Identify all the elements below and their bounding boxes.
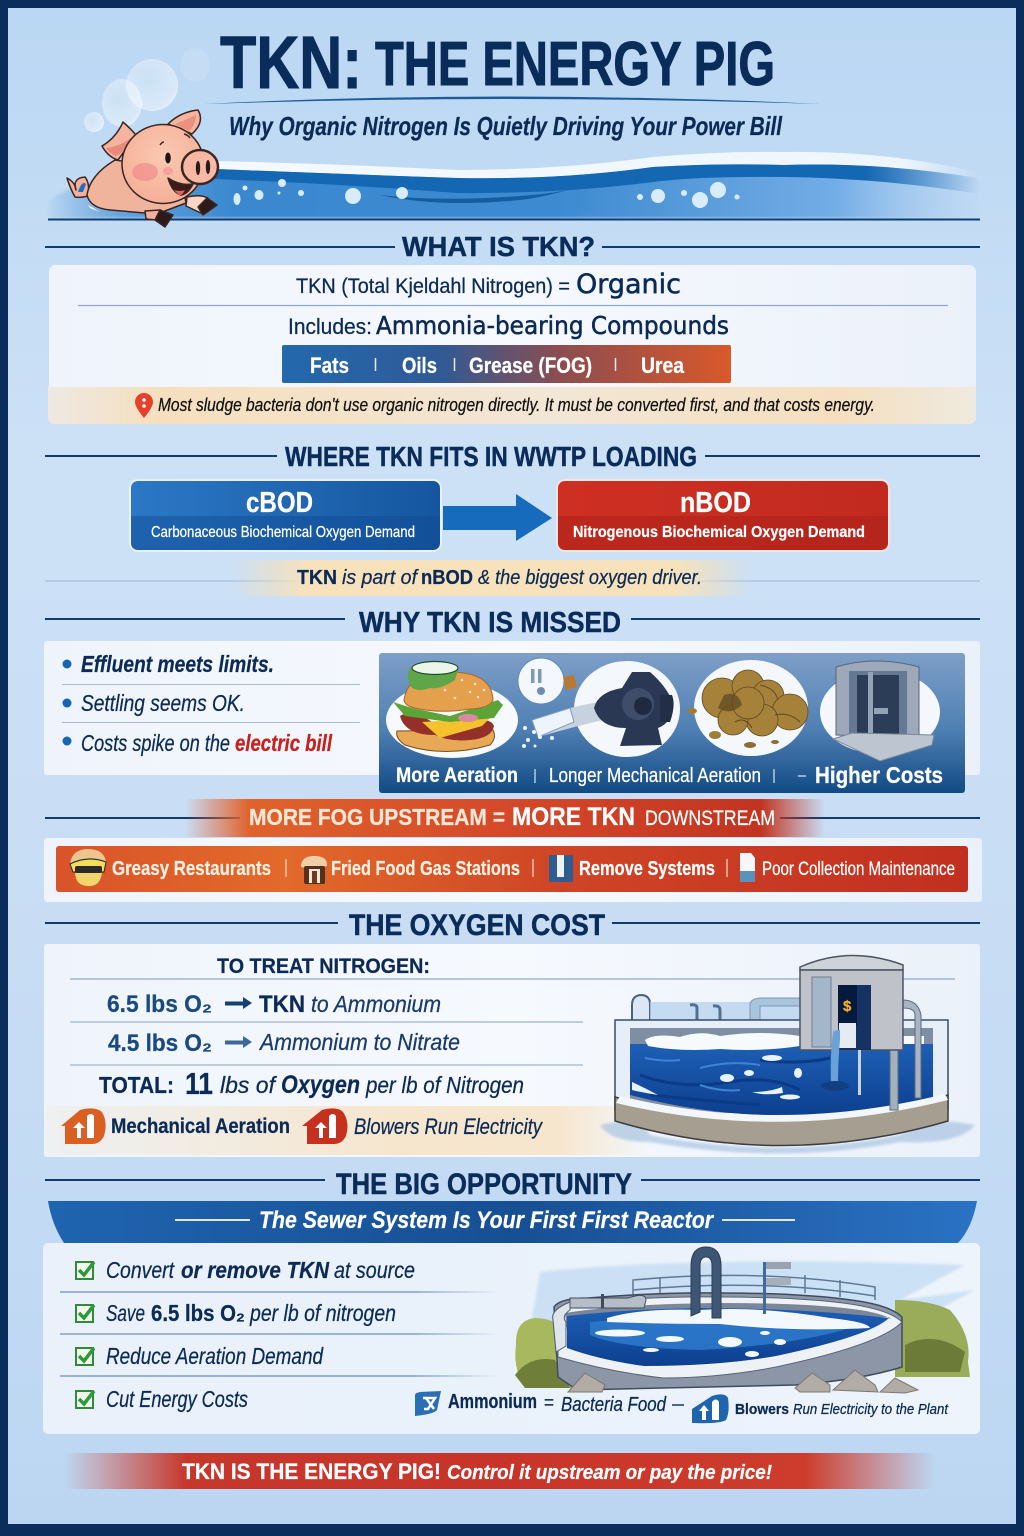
panel: symptoms list: Effluent meets limits. [81,651,274,677]
labels: consequences: Higher Costs [815,762,943,788]
panel: definition [48,265,976,424]
footer banner: TKN IS THE ENERGY PIG! [182,1459,441,1484]
callout: TKN part of nBOD: & the biggest oxygen driver. [478,567,702,589]
note: ammonium bacteria food: = [544,1393,554,1414]
footer banner [65,1453,935,1489]
banner: sewer system reactor [48,1201,977,1243]
checklist: or remove TKN [181,1257,329,1283]
note: blowers electricity [692,1394,949,1423]
section: why TKN is missed [44,607,980,793]
section: the oxygen cost [44,909,980,1157]
illustration: aeration tank with blower housing: $ [843,998,852,1015]
row: TKN to ammonium: to Ammonium [311,991,441,1017]
icon: pig mascot [67,110,218,227]
definition text [296,269,681,300]
row: total oxygen: lbs of [220,1072,278,1098]
box: cBOD: Carbonaceous Biochemical Oxygen Demand [151,524,415,541]
panel: FOG sources: Poor Collection Maintenance [762,859,955,880]
checklist: Cut Energy Costs [106,1386,248,1412]
includes text: Includes: [288,314,372,339]
icon: alert bubble [518,658,577,704]
panel: FOG sources: Fried Food Gas Stations [331,858,520,880]
bar: compounds: Oils [402,353,437,378]
panel: symptoms list: Costs spike on the [81,730,230,756]
bar: compounds: Urea [641,353,685,378]
strip: aeration labels [46,1106,650,1155]
labels: consequences: More Aeration [396,764,518,787]
checklist: at source [334,1257,415,1283]
row: ammonium to nitrate: 4.5 lbs O₂ [108,1030,212,1057]
row: total oxygen: per lb of Nitrogen [365,1072,524,1098]
icon: sludge pile [687,660,808,756]
note: blowers electricity: Blowers [735,1401,789,1418]
row: ammonium to nitrate [108,1029,460,1057]
section: where TKN fits [45,441,980,596]
callout: TKN part of nBOD [45,560,980,596]
panel: oxygen calculation: TO TREAT NITROGEN: [217,955,430,978]
checklist: Reduce Aeration Demand [106,1343,324,1369]
checklist: Save [106,1300,145,1326]
row: TKN to ammonium: 6.5 lbs O₂ [107,991,212,1018]
icon: bubbles [84,48,210,132]
row: total oxygen: TOTAL: [99,1072,174,1098]
title: TKN: [220,21,362,104]
checklist: per lb of nitrogen [249,1300,396,1326]
callout: sludge bacteria note [48,387,976,424]
callout: TKN part of nBOD: TKN [297,567,337,589]
labels: consequences [396,762,943,788]
bar: compounds: Grease (FOG) [469,353,592,378]
icon: fried food store [301,856,327,884]
note: ammonium bacteria food [415,1391,684,1416]
definition text: Organic [576,269,681,300]
title: THE ENERGY PIG [375,30,775,99]
icon: cost cabinet [820,661,940,761]
box: nBOD: nBOD [680,487,751,519]
panel: consequences illustration [379,653,965,793]
heading: where TKN fits: WHERE TKN FITS IN WWTP LOADING [285,441,697,472]
row: TKN to ammonium [107,991,441,1018]
includes text: Ammonia-bearing Compounds [376,311,729,340]
heading: what is TKN: WHAT IS TKN? [402,231,595,262]
box: cBOD [130,480,441,551]
icon: mechanical aerator [522,661,680,757]
callout: sludge bacteria note: Most sludge bacteria don't use organic nitrogen directly. It must be converted first, and that costs energy. [158,395,875,415]
heading: the oxygen cost: THE OXYGEN COST [349,909,605,942]
note: blowers electricity: Run Electricity to the Plant [793,1401,949,1418]
heading: the big opportunity: THE BIG OPPORTUNITY [336,1168,632,1201]
row: total oxygen [99,1066,524,1101]
callout: TKN part of nBOD: is part of [342,567,419,589]
icon: removal system [549,855,573,882]
banner: more FOG upstream: MORE TKN [512,803,635,831]
icon: burger [386,662,518,758]
icon: greasy burger [70,849,106,886]
bar: compounds [282,345,731,383]
banner: more FOG upstream [45,799,980,837]
labels: consequences: Longer Mechanical Aeration [549,765,761,787]
row: total oxygen: Oxygen [281,1071,360,1099]
illustration: aeration tank with blower housing [600,955,975,1154]
row: TKN to ammonium: TKN [259,991,305,1018]
footer banner: Control it upstream or pay the price! [447,1462,772,1484]
illustration: circular aeration basin [515,1247,975,1393]
arrow: cBOD to nBOD [443,494,552,541]
box: nBOD [557,480,889,551]
water wave banner [48,152,980,220]
banner: sewer system reactor: The Sewer System Is Your First First Reactor [259,1207,714,1234]
banner: more FOG upstream: MORE FOG UPSTREAM = [249,804,505,830]
panel: symptoms list [44,641,980,775]
strip: aeration labels: Blowers Run Electricity [354,1114,544,1139]
bar: compounds: Fats [310,353,349,378]
note: ammonium bacteria food: Ammonium [448,1391,537,1413]
checklist [76,1257,415,1412]
icon: document [740,853,755,882]
heading: why TKN is missed: WHY TKN IS MISSED [359,607,621,639]
strip: aeration labels: Mechanical Aeration [111,1115,290,1138]
note: ammonium bacteria food: Bacteria Food [561,1394,667,1416]
box: cBOD: cBOD [246,487,313,519]
panel: symptoms list: Settling seems OK. [81,690,245,716]
panel: symptoms list: electric bill [235,730,332,756]
panel: oxygen calculation [44,944,980,1157]
banner: more FOG upstream: DOWNSTREAM [645,807,775,830]
box: nBOD: Nitrogenous Biochemical Oxygen Demand [573,524,865,541]
checklist: Convert [106,1257,175,1283]
panel: opportunity list [43,1243,980,1434]
row: ammonium to nitrate: Ammonium to Nitrate [258,1029,460,1055]
section: what is TKN [45,231,980,424]
panel: FOG sources: Remove Systems [579,858,715,880]
row: total oxygen: 11 [185,1066,213,1101]
checklist: 6.5 lbs O₂ [151,1300,245,1326]
callout: TKN part of nBOD: nBOD [421,567,473,589]
definition text: TKN (Total Kjeldahl Nitrogen) = [296,275,570,298]
subtitle: Why Organic Nitrogen Is Quietly Driving Your Power Bill [229,111,783,141]
panel: FOG sources [44,838,982,902]
title [205,21,820,104]
panel: FOG sources: Greasy Restaurants [112,858,271,880]
section: the big opportunity [43,1168,980,1434]
